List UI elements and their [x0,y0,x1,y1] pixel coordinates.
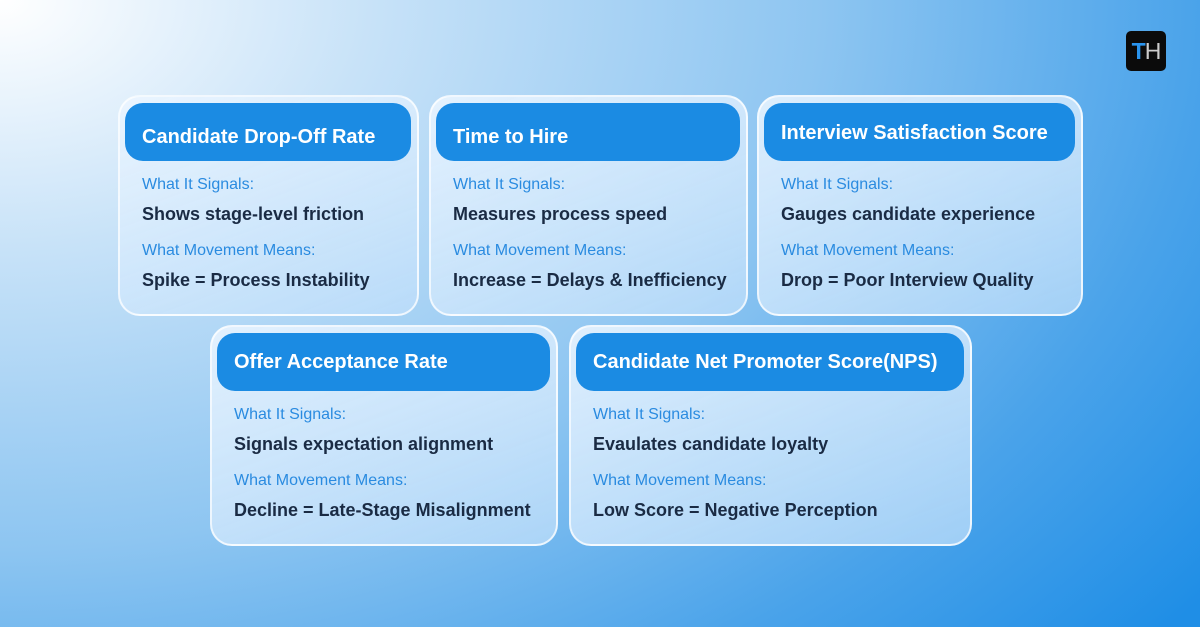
text block [453,176,727,290]
header [125,103,411,161]
card: Candidate NPS: What Movement Means: [593,472,766,489]
card: Offer Acceptance Rate: Signals expectation alignment [234,434,493,454]
logo [1126,31,1166,71]
card: Interview Satisfaction Score: Gauges candidate experience [781,204,1035,224]
card: Candidate Drop-Off Rate: What Movement Means: [142,242,315,259]
card: Offer Acceptance Rate: What It Signals: [234,406,346,423]
card: Interview Satisfaction Score: What Movement Means: [781,242,954,259]
header [217,333,550,391]
card: Interview Satisfaction Score: What It Signals: [781,176,893,193]
card: Time to Hire: Increase = Delays & Inefficiency [453,270,727,290]
header: Candidate Net Promoter Score(NPS) [593,351,938,373]
header: Offer Acceptance Rate [234,351,448,373]
card: Offer Acceptance Rate: What Movement Means: [234,472,407,489]
card: Offer Acceptance Rate: Decline = Late-Stage Misalignment [234,500,531,520]
card: Interview Satisfaction Score [757,95,1083,316]
card: Candidate Drop-Off Rate: What It Signals: [142,176,254,193]
text block [593,406,878,520]
header [436,103,740,161]
card: Time to Hire: What Movement Means: [453,242,626,259]
card: Time to Hire: What It Signals: [453,176,565,193]
header [764,103,1075,161]
card: Candidate NPS: What It Signals: [593,406,705,423]
header: Candidate Drop-Off Rate [142,126,375,148]
header [576,333,964,391]
header: Interview Satisfaction Score [781,122,1048,144]
card: Offer Acceptance Rate [210,325,558,546]
text block [781,176,1035,290]
card: Time to Hire: Measures process speed [453,204,667,224]
card: Candidate Drop-Off Rate: Spike = Process Instability [142,270,370,290]
header: Time to Hire [453,126,568,148]
card: Candidate Drop-Off Rate: Shows stage-level friction [142,204,364,224]
text block [142,176,370,290]
card: Candidate NPS: Low Score = Negative Perception [593,500,878,520]
text block [234,406,531,520]
card: Candidate Drop-Off Rate [118,95,419,316]
logo: TH [1132,38,1160,64]
card: Interview Satisfaction Score: Drop = Poor Interview Quality [781,270,1034,290]
card: Candidate NPS: Evaulates candidate loyalty [593,434,828,454]
card: Candidate NPS [569,325,972,546]
card: Time to Hire [429,95,748,316]
